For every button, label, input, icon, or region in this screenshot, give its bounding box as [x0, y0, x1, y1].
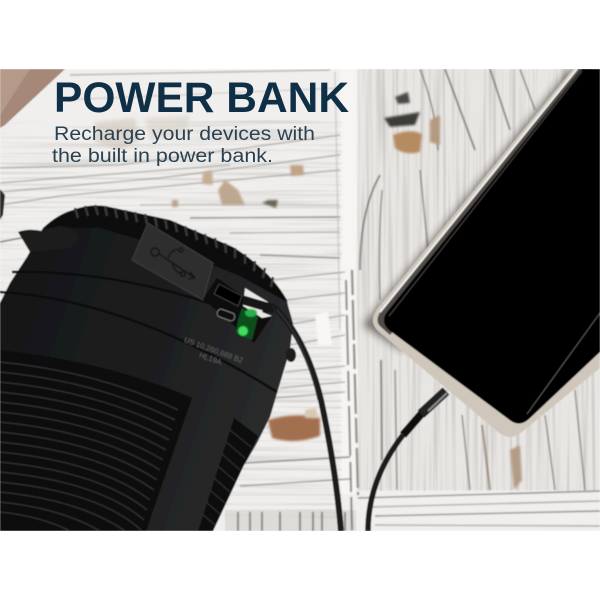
subtitle: the built in power bank.: [52, 146, 273, 167]
lantern right side ribs: [198, 418, 258, 531]
lantern model text: HL19A: [198, 350, 224, 367]
lantern collar bands: [0, 292, 277, 392]
phone charging cable: [368, 391, 447, 531]
photo: lantern charging a phone on a white wooden table: [0, 69, 600, 531]
brown wood corner: [0, 69, 30, 115]
phone shadow: [363, 69, 590, 350]
wood background: [0, 69, 600, 531]
horizontal grain, lower right plank: [358, 491, 600, 526]
subtitle: [52, 124, 315, 167]
lantern ribbed grip panel: [0, 350, 192, 531]
lantern ribbed top ring: [42, 204, 288, 305]
title: POWER BANK: [54, 74, 349, 122]
phone black screen: [384, 69, 600, 424]
horizontal grain texture: [0, 120, 342, 520]
phone clear case: [373, 69, 600, 437]
lantern side knob: [286, 348, 296, 362]
lantern: [0, 205, 341, 531]
phone: [373, 69, 600, 437]
lantern top-left lug: [18, 226, 78, 252]
lantern usb cable: [243, 300, 341, 531]
green indicator light: [236, 308, 258, 340]
usb rubber flap: [132, 223, 213, 300]
micro usb port: [216, 308, 236, 322]
icon: usb symbol: [151, 248, 195, 279]
infographic canvas: [0, 69, 600, 531]
lantern model text: US 10,260,688 B2: [183, 335, 244, 365]
vertical grain, lower left strip: [238, 512, 345, 531]
icon: carabiner clip at left edge: [0, 188, 22, 244]
vertical grain texture: [356, 69, 600, 491]
lantern body: [0, 228, 293, 531]
white gap under plug: [243, 288, 272, 318]
horizontal grain, left plank: [0, 70, 352, 530]
paint chips: [95, 92, 522, 490]
vertical grain, right plank: [352, 69, 585, 495]
subtitle: Recharge your devices with: [54, 124, 315, 145]
usb-a port: [214, 284, 242, 306]
port panel: [203, 278, 272, 343]
